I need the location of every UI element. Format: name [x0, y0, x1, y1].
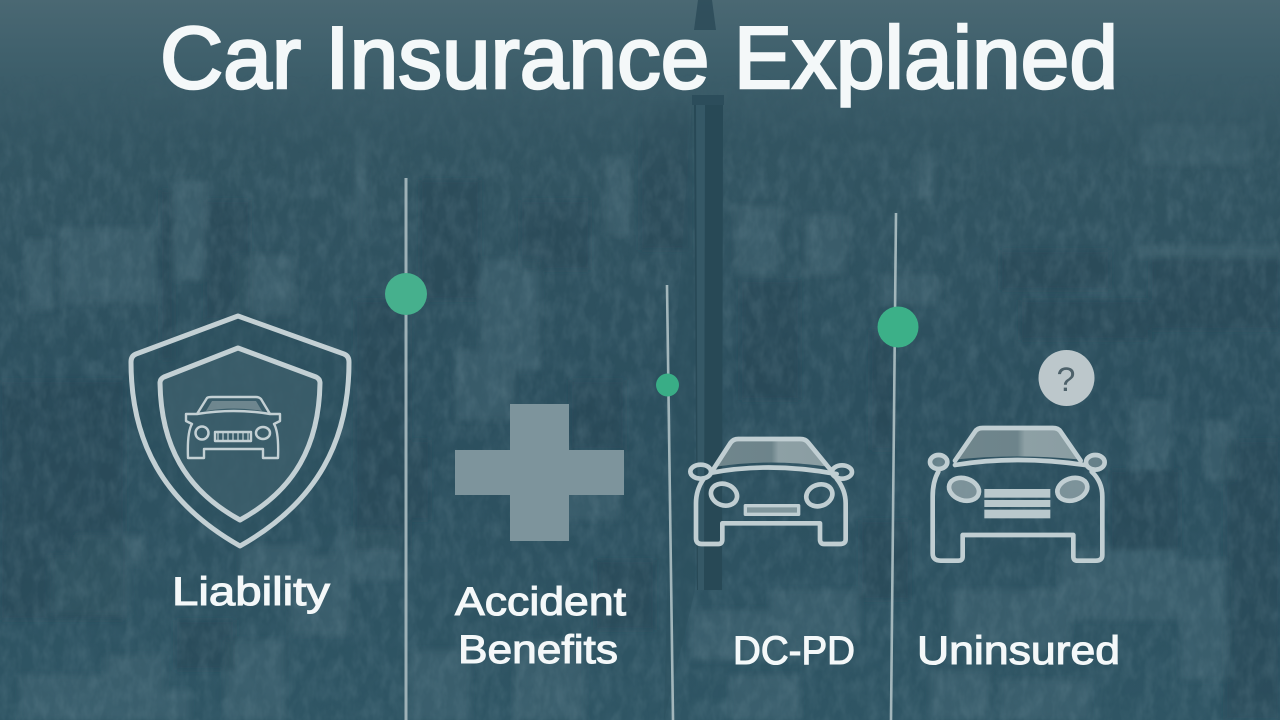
icon: question mark badge: ? [1057, 361, 1075, 399]
title: Car Insurance Explained [160, 8, 1118, 107]
label: Accident Benefits [455, 580, 626, 672]
label: Accident Benefits: Accident [455, 580, 626, 624]
background: tower [664, 0, 724, 720]
label: Liability: Liability [172, 570, 330, 614]
icon: DC-PD car [690, 439, 852, 544]
label: Accident Benefits: Benefits [458, 628, 618, 672]
label: DC-PD: DC-PD [733, 629, 855, 673]
icon: medical cross [455, 404, 624, 541]
timeline line 2 with marker [656, 285, 679, 720]
timeline line 1 with marker [385, 178, 427, 720]
icon: question mark badge [1038, 350, 1094, 406]
label: Uninsured: Uninsured [917, 629, 1120, 673]
icon: liability shield with car [131, 316, 349, 546]
icon: uninsured car [930, 428, 1105, 561]
timeline line 3 with marker [878, 213, 918, 720]
